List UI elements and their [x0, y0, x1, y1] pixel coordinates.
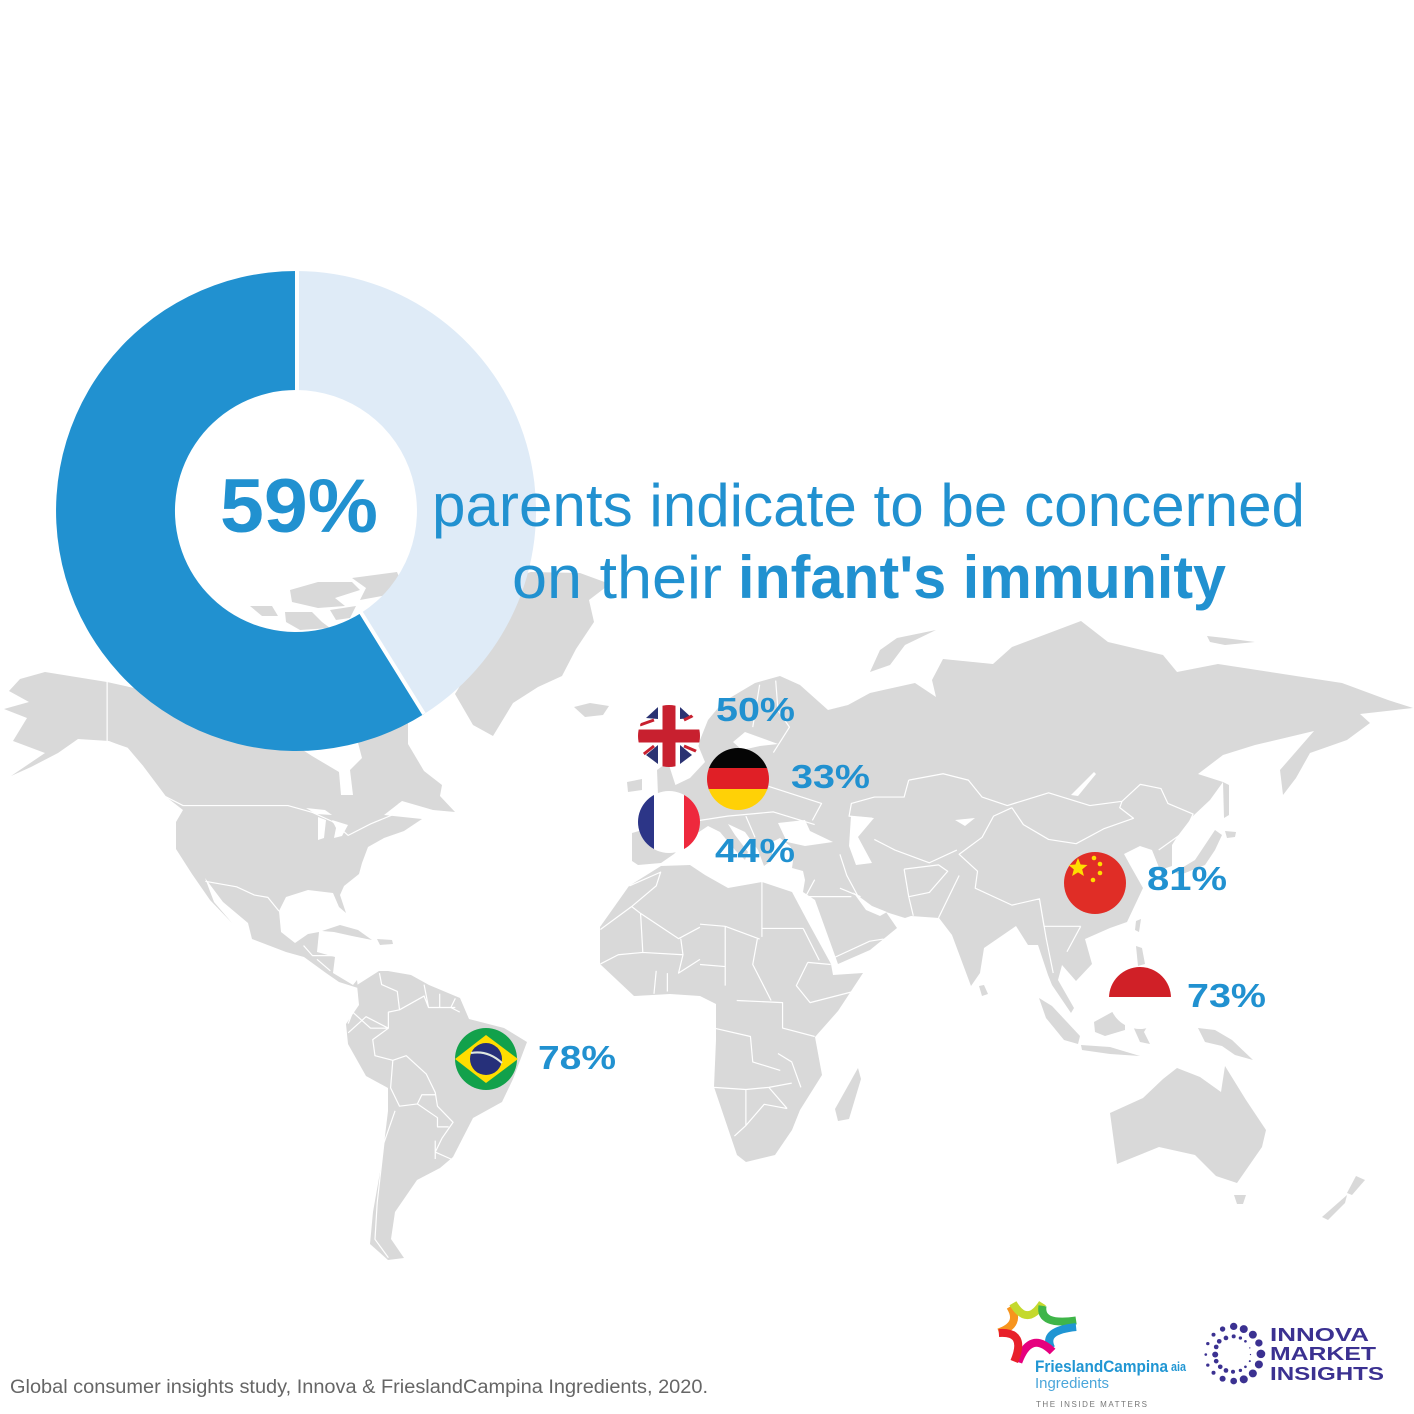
value: UK: 50% [716, 691, 795, 728]
South America [346, 971, 527, 1260]
land masses [4, 572, 1413, 1260]
logo: FrieslandCampina Ingredients: Ingredients [1035, 1375, 1109, 1392]
value: France: 44% [715, 832, 795, 869]
Arctic islands [250, 572, 402, 630]
country borders [107, 681, 1193, 1258]
world map [4, 572, 1413, 1260]
headline: infant's immunity [738, 544, 1227, 611]
logo: Innova Market Insights: MARKET [1270, 1344, 1376, 1364]
headline [432, 472, 1305, 611]
flag: Brazil [455, 1028, 518, 1090]
Eurasia [632, 621, 1413, 1013]
icon: FrieslandCampina star [999, 1303, 1076, 1362]
headline: on their [512, 544, 722, 611]
Australia [1110, 1066, 1266, 1183]
Greenland [440, 572, 610, 736]
borders: South America and West Africa [348, 872, 700, 1258]
Iceland [574, 703, 609, 717]
Madagascar [835, 1068, 861, 1121]
logo: FrieslandCampina Ingredients: FrieslandCampina [1035, 1357, 1168, 1376]
value: Germany: 33% [791, 758, 870, 795]
Hispaniola [377, 939, 393, 945]
flag: Indonesia [1109, 967, 1171, 1029]
royal mark: aia [1171, 1359, 1187, 1374]
Cuba [322, 925, 372, 940]
value: China: 81% [1147, 860, 1227, 897]
New Zealand [1347, 1176, 1365, 1195]
Sakhalin [1223, 782, 1229, 818]
source note: Global consumer insights study, Innova & FrieslandCampina Ingredients, 2020. [10, 1377, 708, 1398]
Arctic Siberian islands [1207, 636, 1255, 645]
Africa [600, 865, 863, 1162]
logo: FrieslandCampina Ingredients [999, 1303, 1187, 1409]
Japan [1175, 830, 1222, 875]
Sri Lanka [979, 985, 988, 996]
islands of Europe [657, 762, 677, 795]
flag: United Kingdom [638, 705, 700, 767]
donut segment: 59% [56, 271, 425, 751]
North America [4, 650, 455, 988]
Sulawesi [1132, 1022, 1150, 1044]
donut segment: remaining 41% [296, 271, 536, 714]
seas and lakes [295, 720, 1096, 916]
borders: Eurasia and Africa [700, 681, 1193, 1136]
Philippines [1136, 946, 1145, 966]
value: Brazil: 78% [538, 1039, 616, 1076]
percentages by country [538, 691, 1266, 1076]
logo: Innova Market Insights: INNOVA [1270, 1325, 1369, 1345]
Novaya Zemlya [870, 630, 936, 672]
logo: Innova Market Insights: INSIGHTS [1270, 1364, 1384, 1384]
flag: Germany [707, 748, 769, 811]
logo: FrieslandCampina Ingredients: THE INSIDE MATTERS [1036, 1400, 1147, 1409]
flag: France [638, 791, 700, 853]
New Guinea [1198, 1028, 1253, 1060]
headline: parents indicate to be concerned [432, 472, 1305, 539]
donut value: 59% [220, 464, 378, 549]
flag: China [1064, 852, 1126, 914]
Sumatra [1039, 998, 1080, 1044]
Java [1081, 1045, 1140, 1056]
Borneo [1094, 1005, 1125, 1036]
value: Indonesia: 73% [1187, 977, 1266, 1014]
Tasmania [1234, 1195, 1246, 1204]
Taiwan [1135, 919, 1141, 932]
logo: Innova Market Insights [1204, 1323, 1384, 1384]
borders: North America [107, 682, 400, 971]
donut chart: 59% [56, 270, 536, 751]
icon: Innova dot ring [1204, 1323, 1265, 1384]
